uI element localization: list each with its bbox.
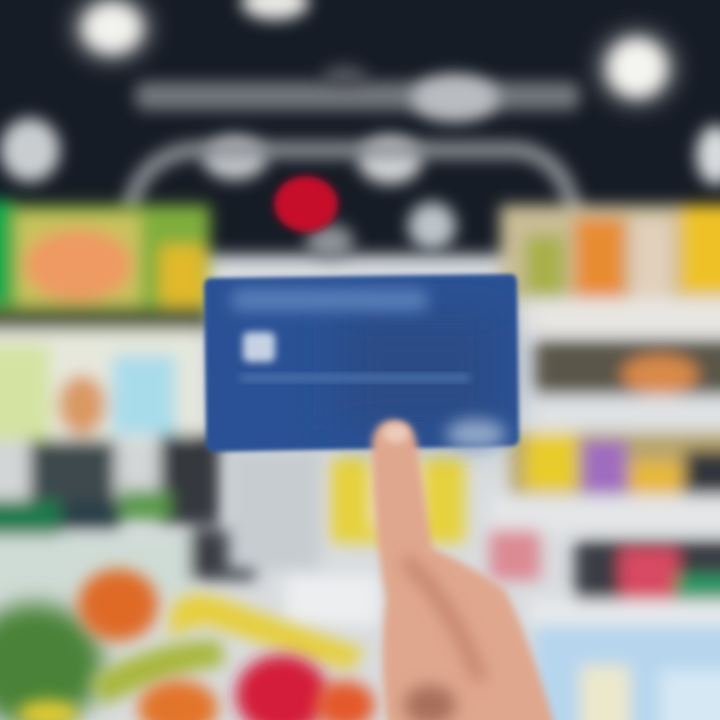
red circular sign marker xyxy=(274,176,338,232)
card title text band xyxy=(232,290,427,310)
card shading xyxy=(340,310,500,430)
palm shading xyxy=(405,560,480,680)
card chip icon xyxy=(243,332,275,362)
sign arches xyxy=(130,150,575,225)
credit card xyxy=(204,274,519,452)
card body xyxy=(204,274,519,452)
center shelf: white and yellow packages below the card xyxy=(228,450,465,625)
card logo xyxy=(446,419,506,449)
right shelves: packaged goods xyxy=(490,205,720,720)
fresh produce: greens, oranges, bananas, tomatoes xyxy=(0,569,375,720)
hand with pointing finger xyxy=(372,420,556,720)
hand body xyxy=(372,420,556,720)
fingertip highlight xyxy=(383,423,409,443)
left shelves: produce signage and packaging xyxy=(0,200,255,595)
store sign: blurred heading band xyxy=(135,66,580,260)
palm crease shadow xyxy=(404,685,456,720)
card detail line xyxy=(240,374,470,382)
ceiling lights xyxy=(0,0,720,185)
